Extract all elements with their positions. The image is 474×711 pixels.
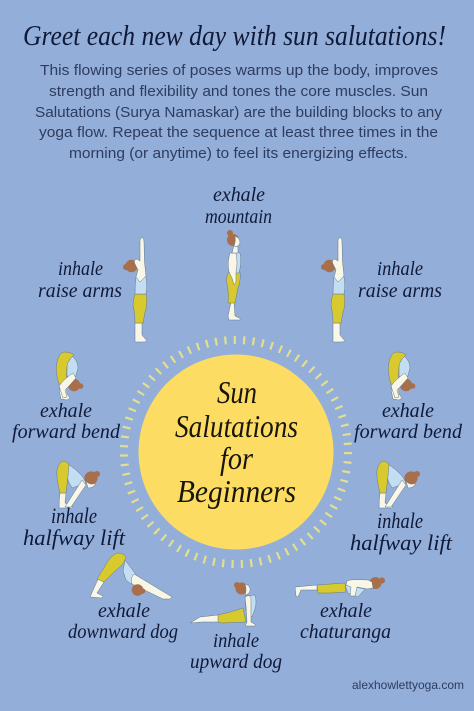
intro paragraph [35, 62, 442, 162]
pose: chaturanga [295, 577, 385, 597]
label: mountain: exhale [213, 184, 265, 206]
label: chaturanga: chaturanga [300, 621, 391, 643]
pose: upward dog [190, 582, 256, 626]
intro paragraph: Salutations (Surya Namaskar) are the building blocks to any [35, 104, 442, 121]
pose: downward dog [90, 553, 172, 599]
sun disc [138, 354, 334, 550]
label: forward bend left: exhale [40, 400, 92, 422]
sun title: Salutations [175, 408, 298, 444]
sun rays [124, 340, 348, 564]
label: halfway lift right: halfway lift [350, 530, 453, 555]
label: downward dog: downward dog [68, 621, 178, 643]
label: halfway lift right: inhale [377, 508, 423, 533]
label: upward dog: inhale [213, 630, 259, 652]
label: forward bend left [12, 400, 121, 443]
sun title: for [220, 440, 253, 476]
sun title: Beginners [177, 473, 296, 509]
pose: raise arms left [123, 238, 147, 342]
label: forward bend right: exhale [382, 400, 434, 422]
label: raise arms left: inhale [58, 258, 103, 280]
website credit: alexhowlettyoga.com [352, 678, 464, 692]
pose: forward bend right [388, 352, 415, 400]
label: raise arms right: inhale [377, 258, 423, 280]
pose: halfway lift left [57, 461, 100, 508]
label: downward dog: exhale [98, 600, 150, 622]
sun [124, 340, 348, 564]
sun title: Sun [217, 374, 257, 410]
intro paragraph: This flowing series of poses warms up the body, improves [40, 62, 438, 79]
label: downward dog [68, 600, 178, 643]
label: forward bend right: forward bend [354, 421, 463, 443]
pose: raise arms right [321, 238, 345, 342]
label: chaturanga: exhale [320, 600, 372, 622]
pose: halfway lift right [377, 461, 420, 508]
intro paragraph: morning (or anytime) to feel its energizing effects. [69, 145, 408, 162]
label: upward dog [190, 630, 282, 673]
label: mountain [205, 184, 272, 228]
label: mountain: mountain [205, 206, 272, 228]
intro paragraph: strength and flexibility and tones the core muscles. Sun [49, 83, 428, 100]
label: forward bend left: forward bend [12, 421, 121, 443]
intro paragraph: yoga flow. Repeat the sequence at least three times in the [39, 124, 438, 141]
label: upward dog: upward dog [190, 651, 282, 673]
label: halfway lift left: halfway lift [23, 525, 126, 550]
label: chaturanga [300, 600, 391, 643]
label: raise arms right: raise arms [358, 280, 442, 302]
label: halfway lift right [350, 508, 453, 555]
label: raise arms left [38, 258, 122, 302]
label: raise arms left: raise arms [38, 280, 122, 302]
pose: mountain [226, 230, 241, 320]
label: raise arms right [358, 258, 442, 302]
sun title [175, 374, 298, 509]
label: halfway lift left [23, 503, 126, 550]
pose: forward bend left [56, 352, 83, 400]
label: forward bend right [354, 400, 463, 443]
label: halfway lift left: inhale [51, 503, 97, 528]
